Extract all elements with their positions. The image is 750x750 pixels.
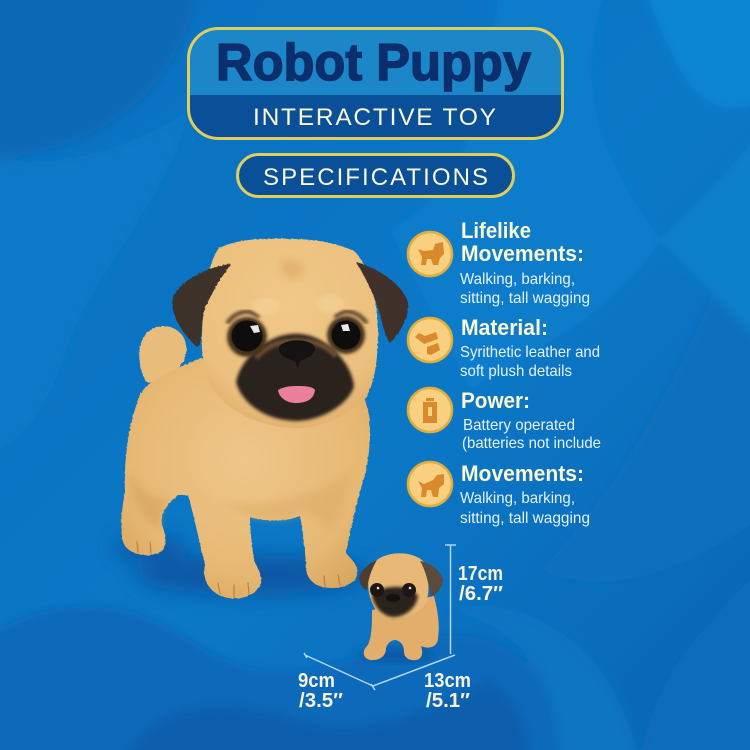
right eye: [327, 316, 365, 354]
feature: movements: Walking, barking,: [460, 490, 575, 507]
feature: lifelike movements: [408, 218, 590, 307]
icon: dog: [408, 462, 452, 506]
dimension: height: /6.7″: [459, 583, 503, 605]
head: [202, 239, 378, 428]
subtitle text: INTERACTIVE TOY: [253, 104, 496, 131]
dimension: width: 13cm: [424, 670, 471, 692]
icon: dog: [408, 232, 452, 276]
dimension: depth: [298, 670, 343, 712]
forehead shading: [280, 259, 304, 278]
feature: material: soft plush details: [460, 363, 572, 380]
specifications pill: [238, 154, 514, 196]
brow wrinkles: [228, 312, 366, 322]
feature: lifelike movements: Lifelike: [461, 218, 531, 243]
rear leg shading: [130, 470, 170, 530]
feature: material: [408, 315, 600, 380]
right ear: [356, 262, 408, 343]
body and legs: [121, 358, 370, 599]
brow bumps: [252, 295, 344, 315]
dimension: depth: 9cm: [298, 670, 335, 692]
feature: lifelike movements: Movements:: [461, 241, 584, 266]
feature: movements: sitting, tall wagging: [460, 510, 590, 527]
small body: [364, 596, 439, 660]
small pug: [358, 553, 443, 661]
feature: material: Material:: [461, 315, 548, 340]
small shadow: [358, 649, 434, 661]
tongue: [278, 386, 315, 403]
specifications pill: SPECIFICATIONS: [263, 164, 488, 191]
left eye: [227, 317, 267, 357]
feature: power: (batteries not include: [462, 435, 601, 452]
nose: [279, 340, 315, 368]
feature: movements: Movements:: [461, 461, 584, 486]
floor shadow: [114, 536, 365, 595]
icon: material pieces: [408, 318, 452, 362]
feature: movements: [408, 461, 590, 527]
dimension: width: /5.1″: [426, 690, 470, 712]
dimension: height: [458, 563, 503, 605]
feature: material: Syrithetic leather and: [460, 344, 600, 361]
small head: [368, 553, 428, 619]
dimension: height: 17cm: [458, 563, 503, 585]
chest shading: [186, 470, 352, 530]
tail: [139, 326, 186, 383]
small eyes and nose: [370, 583, 416, 602]
muzzle: [236, 334, 354, 421]
dimension: width: [424, 670, 471, 712]
icon: battery: [408, 388, 452, 432]
small muzzle: [372, 587, 418, 617]
feature: lifelike movements: sitting, tall wagging: [460, 290, 590, 307]
dimension: depth: /3.5″: [299, 690, 343, 712]
large pug: [114, 239, 408, 599]
small ears: [359, 560, 377, 590]
dimension lines: [304, 545, 456, 690]
feature: power: Power:: [461, 388, 530, 413]
feature: power: [408, 388, 601, 452]
title banner: [188, 28, 562, 138]
nose wrinkle: [256, 340, 336, 358]
feature: lifelike movements: Walking, barking,: [460, 271, 575, 288]
paw toes: [137, 542, 340, 598]
title text: Robot Puppy: [216, 34, 531, 92]
left ear: [172, 264, 231, 347]
feature: power: Battery operated: [463, 417, 575, 434]
